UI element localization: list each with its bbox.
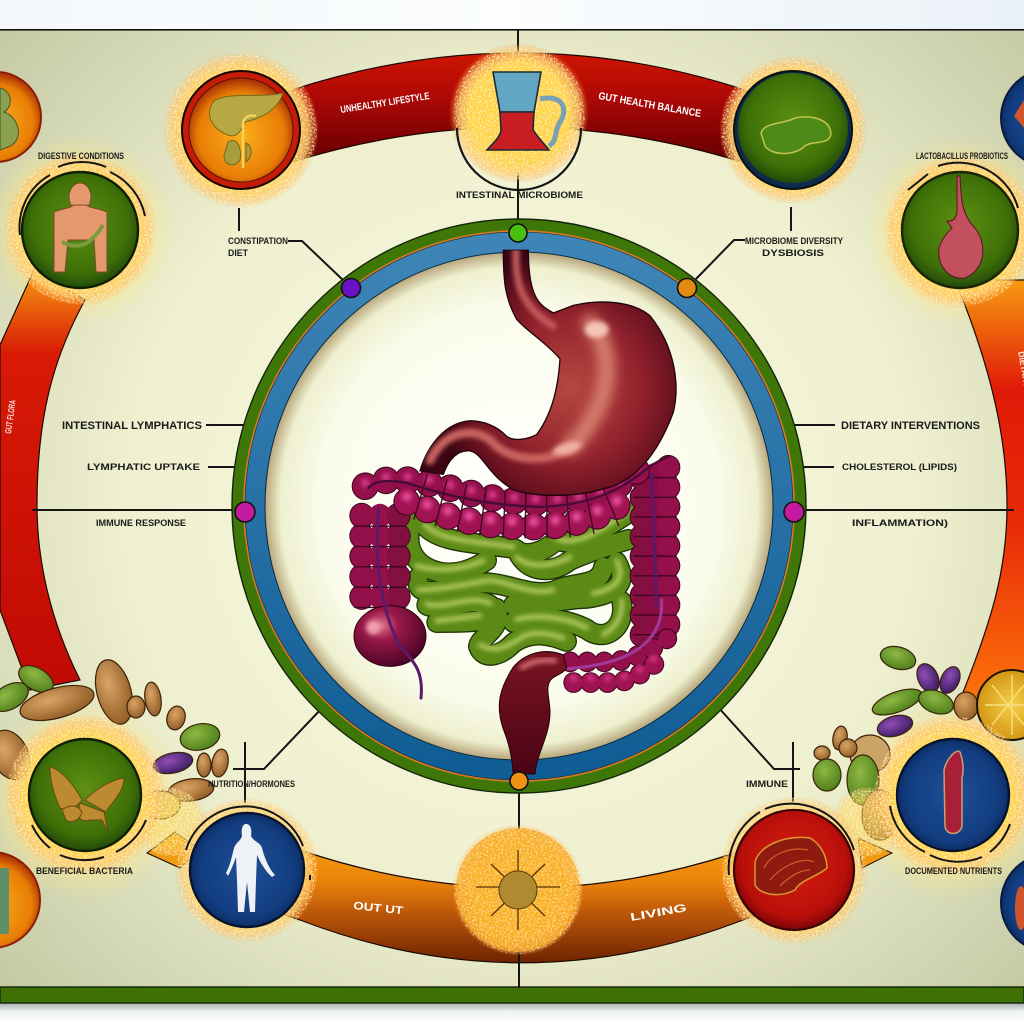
left band label: GUT FLORA bbox=[3, 399, 18, 434]
sigmoid colon bbox=[570, 638, 668, 683]
far-left lower orange medallion bbox=[0, 852, 40, 948]
ascending colon bbox=[362, 512, 398, 615]
label inflammation: INFLAMMATION) bbox=[852, 518, 948, 528]
connector stub right bbox=[858, 838, 892, 868]
food cluster right bbox=[813, 643, 1024, 840]
footer bar bbox=[0, 987, 1024, 1003]
connector stub left bbox=[147, 832, 200, 868]
rectum bbox=[499, 652, 567, 774]
ring node green top bbox=[509, 224, 527, 242]
label top center: INTESTINAL MICROBIOME bbox=[456, 190, 583, 200]
far-left orange medallion bbox=[0, 72, 41, 162]
lemon bbox=[977, 670, 1024, 740]
icon: butterfly bbox=[50, 767, 124, 832]
icon: spleen bbox=[761, 117, 831, 154]
medallion: human figure bbox=[175, 798, 319, 942]
large intestine bbox=[362, 465, 668, 683]
label microbial: MICROBIOME DIVERSITY bbox=[745, 236, 843, 246]
medallion: cup bbox=[449, 43, 589, 190]
left arc band bbox=[0, 270, 85, 690]
medallion: torso bbox=[4, 154, 156, 306]
right arc band bbox=[955, 280, 1024, 720]
medallion: green organ bbox=[719, 56, 867, 204]
ring node orange right bbox=[678, 278, 696, 298]
label nutrition: NUTRITION/HORMONES bbox=[208, 779, 295, 789]
digestive system bbox=[354, 250, 676, 774]
icon: brain-like tissue bbox=[755, 837, 827, 895]
decorative soft halos bbox=[0, 135, 1024, 900]
ring node magenta left bbox=[235, 502, 255, 522]
label cholesterol: CHOLESTEROL (LIPIDS) bbox=[842, 462, 957, 472]
icon: stomach bbox=[939, 176, 983, 278]
label diet: DIET bbox=[228, 248, 248, 258]
descending colon bbox=[642, 465, 668, 646]
icon: liver bbox=[209, 93, 283, 168]
stomach bbox=[420, 250, 676, 495]
far-right lower blue medallion bbox=[1001, 854, 1024, 952]
ring node orange bottom bbox=[510, 772, 528, 790]
label dysbiosis: DYSBIOSIS bbox=[762, 248, 824, 258]
bottom arc band bbox=[147, 832, 892, 963]
colon veins bbox=[368, 457, 668, 698]
big ring bbox=[232, 219, 806, 793]
icon: sun bbox=[476, 850, 560, 930]
glow bridge lower left bbox=[134, 786, 206, 858]
label constipation: CONSTIPATION bbox=[228, 236, 288, 246]
medallion: liver bbox=[163, 52, 319, 208]
label lymphatic uptake: LYMPHATIC UPTAKE bbox=[87, 462, 200, 472]
label immune: IMMUNE bbox=[746, 779, 788, 789]
label dietary interventions: DIETARY INTERVENTIONS bbox=[841, 420, 980, 432]
label upper left: DIGESTIVE CONDITIONS bbox=[38, 151, 124, 161]
icon: body silhouette bbox=[226, 824, 275, 912]
medallion: butterfly bbox=[5, 715, 165, 875]
far-right blue medallion bbox=[1001, 69, 1024, 167]
top band label left: UNHEALTHY LIFESTYLE bbox=[340, 91, 431, 116]
medallion: villus bbox=[873, 715, 1024, 875]
icon: villus bbox=[944, 751, 963, 834]
top arc band bbox=[262, 53, 775, 172]
small intestine bbox=[409, 511, 630, 655]
medallion: stomach icon bbox=[884, 156, 1024, 308]
transverse colon bbox=[365, 467, 637, 527]
label immune response: IMMUNE RESPONSE bbox=[96, 518, 186, 528]
icon: cup bbox=[487, 72, 564, 150]
cecum bbox=[354, 606, 426, 666]
bottom band label left: OUT UT bbox=[353, 900, 404, 917]
ring node purple bbox=[342, 278, 360, 298]
labels bbox=[36, 151, 1008, 876]
medallion: red organ bbox=[720, 796, 868, 944]
label intestinal lymphatics: INTESTINAL LYMPHATICS bbox=[62, 420, 202, 432]
medallion: sunburst bbox=[452, 824, 584, 956]
bottom band label right: LIVING bbox=[629, 902, 688, 924]
label lower left: BENEFICIAL BACTERIA bbox=[36, 866, 133, 876]
food cluster left bbox=[0, 656, 230, 819]
ring node magenta right bbox=[784, 502, 804, 522]
top band label right: GUT HEALTH BALANCE bbox=[597, 90, 702, 120]
label lower right: DOCUMENTED NUTRIENTS bbox=[905, 866, 1002, 876]
glow bridge lower right bbox=[832, 786, 904, 858]
icon: human torso bbox=[54, 183, 107, 272]
